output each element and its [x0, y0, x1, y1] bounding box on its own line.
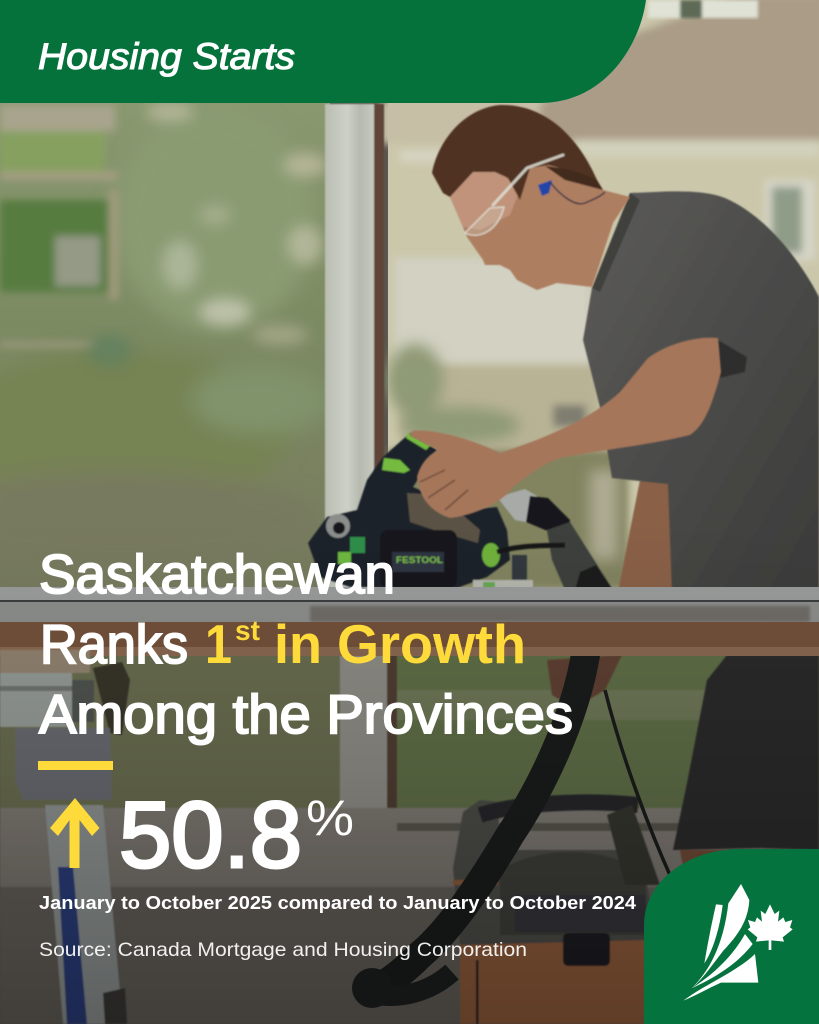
- headline line 2: 1st in Growth: st: [235, 615, 260, 646]
- man: head and neck: [432, 105, 630, 290]
- metal stand: [0, 650, 130, 1024]
- logo panel: [644, 849, 819, 1024]
- icon: up arrow: [50, 798, 100, 868]
- caption: comparison period: January to October 2025 compared to January to October 2024: [39, 892, 637, 913]
- headline line 3: Among the Provinces: [39, 683, 573, 745]
- source note: Source: Canada Mortgage and Housing Corporation: [39, 939, 527, 961]
- work table with wood edge: [0, 587, 819, 656]
- track saw: [308, 433, 613, 590]
- statistic: 50.8%: %: [306, 790, 354, 846]
- icon: Government of Saskatchewan logo: [683, 884, 793, 1001]
- headline: [39, 543, 573, 745]
- statistic: 50.8%: 50.8: [119, 782, 302, 887]
- icon: blue ear plug and cord: [538, 180, 605, 204]
- icon: safety glasses: [465, 155, 563, 235]
- vacuum: [453, 800, 660, 1024]
- headline line 1: Saskatchewan: [39, 543, 395, 605]
- photo background: blurred garden through the window: [0, 0, 819, 600]
- vacuum hose: [352, 652, 673, 1008]
- header banner: [0, 0, 646, 103]
- headline line 2: 1st in Growth: in Growth: [274, 613, 526, 675]
- headline line 2: Ranks: Ranks: [40, 613, 188, 675]
- man: shorts and lower arm: [547, 470, 819, 872]
- man: t-shirt: [583, 191, 819, 592]
- headline line 2: 1st in Growth: 1: [205, 613, 232, 675]
- yellow divider: [38, 761, 113, 770]
- title: Housing Starts: Housing Starts: [38, 36, 295, 77]
- saw brand label: FESTOOL: [396, 555, 443, 566]
- man: forearm and hand: [410, 338, 721, 518]
- photo darkening overlay: [0, 520, 819, 1024]
